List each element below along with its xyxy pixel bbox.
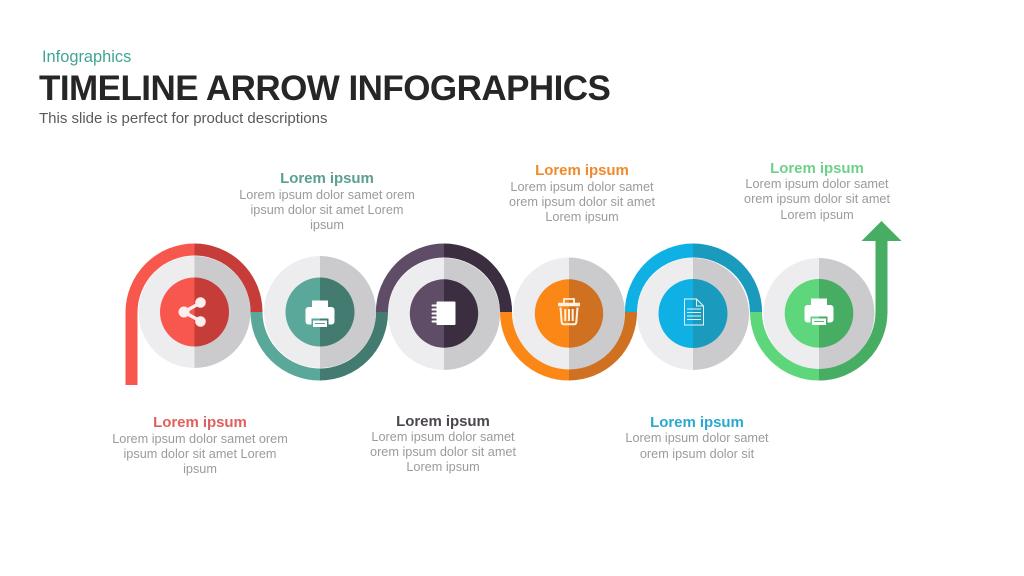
step 5 path: blue arc (631, 250, 756, 312)
text block: blue step: orem ipsum dolor sit (640, 447, 754, 461)
text block: red step: ipsum (183, 462, 217, 476)
text block: teal step: Lorem ipsum (280, 170, 374, 187)
subtitle: This slide is perfect for product descriptions (39, 110, 327, 127)
step 2 path: teal arc (256, 312, 382, 374)
icon: printer (306, 300, 334, 327)
text block: purple step (370, 413, 516, 474)
text block: blue step (625, 414, 769, 461)
icon: trash can (558, 299, 580, 324)
text block: purple step: Lorem ipsum dolor samet (371, 430, 515, 444)
step 6 medallion: printer icon (764, 258, 874, 369)
text block: teal step: ipsum (310, 218, 344, 232)
icon: notebook (432, 302, 456, 325)
text block: orange step: Lorem ipsum (545, 210, 619, 224)
text block: red step: Lorem ipsum dolor samet orem (112, 432, 288, 446)
title: TIMELINE ARROW INFOGRAPHICS (39, 69, 610, 108)
icon: printer (804, 298, 834, 325)
eyebrow label: Infographics (42, 48, 131, 66)
text block: red step: ipsum dolor sit amet Lorem (123, 447, 276, 461)
text block: green step (744, 160, 890, 222)
text block: green step: Lorem ipsum dolor samet (745, 177, 889, 191)
step 5 medallion: document icon (637, 258, 749, 370)
step 1 medallion: share icon (138, 256, 250, 368)
icon: share (178, 297, 206, 327)
text block: green step: orem ipsum dolor sit amet (744, 192, 890, 206)
text block: blue step: Lorem ipsum dolor samet (625, 431, 769, 445)
text block: red step: Lorem ipsum (153, 414, 247, 431)
text block: orange step (509, 162, 655, 224)
step 1 path: red arc (132, 250, 256, 385)
text block: purple step: orem ipsum dolor sit amet (370, 445, 516, 459)
text block: teal step: Lorem ipsum dolor samet orem (239, 188, 415, 202)
step 6 path: green arc with arrow (756, 221, 902, 374)
step 3 medallion: notebook icon (388, 258, 500, 370)
text block: red step (112, 414, 288, 476)
icon: document (684, 299, 704, 325)
text block: purple step: Lorem ipsum (396, 413, 490, 430)
text block: orange step: orem ipsum dolor sit amet (509, 195, 655, 209)
step 3 path: purple arc (382, 250, 506, 312)
text block: purple step: Lorem ipsum (406, 460, 480, 474)
text block: teal step (239, 170, 415, 232)
text block: orange step: Lorem ipsum dolor samet (510, 180, 654, 194)
step 2 medallion: printer icon (264, 256, 376, 368)
text block: blue step: Lorem ipsum (650, 414, 744, 431)
arrow head (862, 221, 902, 241)
step 4 path: orange arc (506, 312, 631, 374)
text block: green step: Lorem ipsum (770, 160, 864, 177)
text block: green step: Lorem ipsum (780, 208, 854, 222)
step 4 medallion: trash icon (513, 258, 625, 370)
text block: teal step: ipsum dolor sit amet Lorem (250, 203, 404, 217)
text block: orange step: Lorem ipsum (535, 162, 629, 179)
